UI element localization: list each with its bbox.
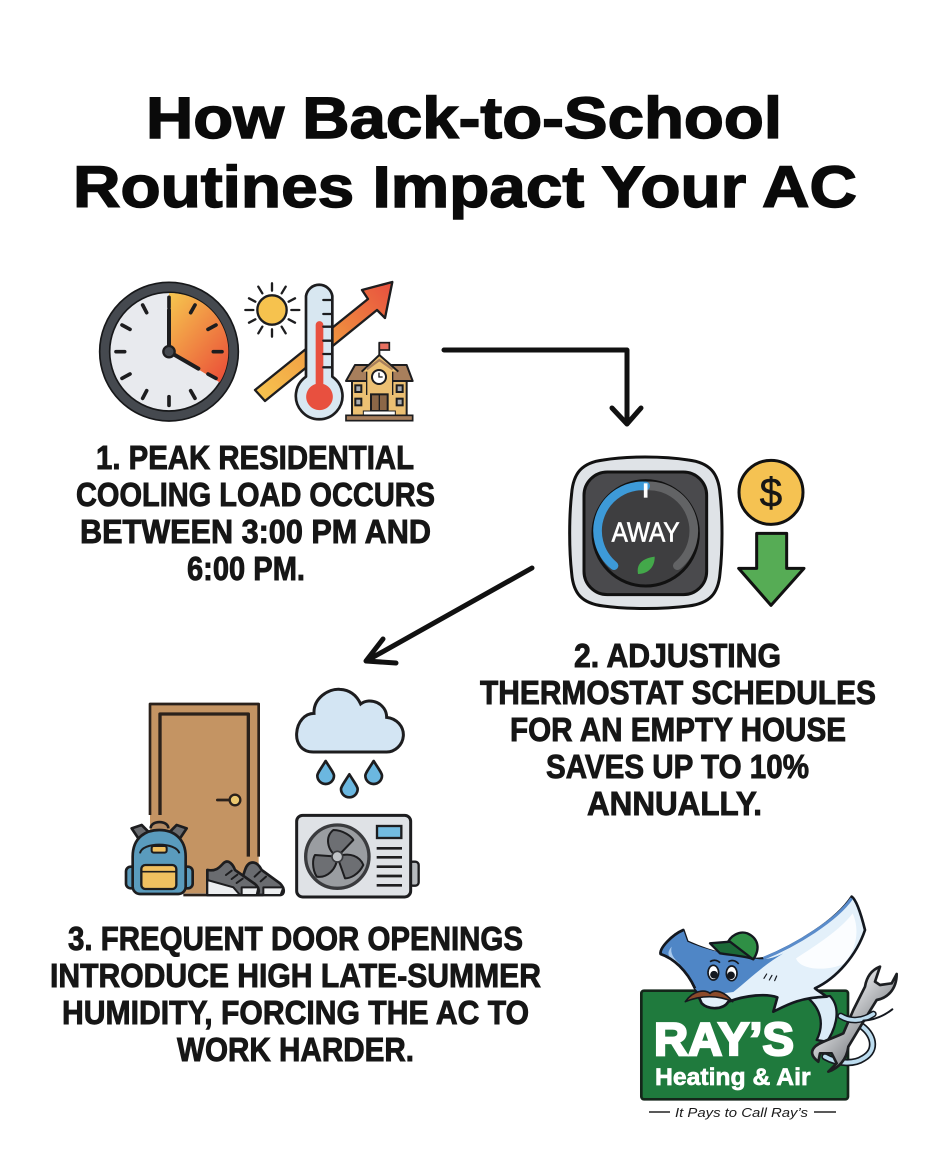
tagline: It Pays to Call Ray’s — [675, 1105, 809, 1120]
icon: humid rain cloud — [297, 689, 403, 797]
hat — [727, 933, 758, 959]
icon: outdoor AC unit — [297, 815, 419, 897]
icon: sun — [245, 283, 299, 337]
text: step 3: INTRODUCE HIGH LATE-SUMMER — [50, 957, 541, 994]
panel: step 2 thermostat schedule — [480, 457, 876, 822]
text: step 2: SAVES UP TO 10% — [546, 748, 809, 785]
icon: open door — [150, 704, 263, 895]
green sign board — [641, 991, 848, 1099]
icon: thermostat set to away: AWAY — [612, 517, 680, 548]
green sign board: RAY’S — [654, 1013, 794, 1065]
icon: thermometer — [296, 285, 342, 419]
text: step 1: COOLING LOAD OCCURS — [76, 476, 435, 513]
text: step 2: 2. ADJUSTING — [574, 637, 781, 674]
icon: rising temperature arrow — [255, 282, 392, 401]
text: step 3: WORK HARDER. — [177, 1031, 414, 1068]
icon: school building — [346, 343, 413, 421]
text: step 2: THERMOSTAT SCHEDULES — [480, 674, 876, 711]
logo: Ray's Heating & Air — [641, 897, 897, 1120]
arrow: step 1 to step 2 — [444, 350, 641, 424]
text: step 1: BETWEEN 3:00 PM AND — [80, 513, 431, 550]
text: step 3 — [50, 920, 541, 1068]
text: step 3: HUMIDITY, FORCING THE AC TO — [62, 994, 529, 1031]
eyes — [708, 960, 739, 981]
text: step 1: 1. PEAK RESIDENTIAL — [96, 439, 414, 476]
panel: step 1 peak cooling load — [76, 282, 435, 587]
text: step 3: 3. FREQUENT DOOR OPENINGS — [68, 920, 523, 957]
icon: dollar coin: $ — [760, 470, 782, 516]
icon: wrench — [812, 967, 897, 1072]
tail loop behind wrench — [825, 1025, 873, 1063]
panel: step 3 door openings and humidity — [50, 689, 541, 1068]
arrow: step 2 to step 3 — [366, 568, 532, 663]
icon: dollar coin — [739, 460, 803, 524]
text: step 1 — [76, 439, 435, 587]
icon: thermostat set to away — [570, 457, 722, 608]
icon: backpack — [126, 822, 193, 894]
mustache — [685, 991, 733, 1002]
text: step 2: ANNUALLY. — [587, 785, 762, 822]
title: Routines Impact Your AC — [73, 155, 857, 220]
icon: sneakers — [207, 862, 284, 895]
green sign board: Heating & Air — [655, 1064, 811, 1091]
text: step 1: 6:00 PM. — [187, 550, 305, 587]
tail base — [808, 996, 837, 1042]
body and wing — [661, 897, 865, 1012]
title — [73, 86, 857, 220]
title: How Back-to-School — [146, 86, 782, 151]
text: step 2: FOR AN EMPTY HOUSE — [510, 711, 846, 748]
mascot: manta ray — [661, 897, 873, 1063]
blue head and fin — [661, 930, 783, 996]
icon: clock with peak hours wedge — [100, 282, 238, 421]
icon: green down arrow — [739, 533, 804, 605]
text: step 2 — [480, 637, 876, 822]
